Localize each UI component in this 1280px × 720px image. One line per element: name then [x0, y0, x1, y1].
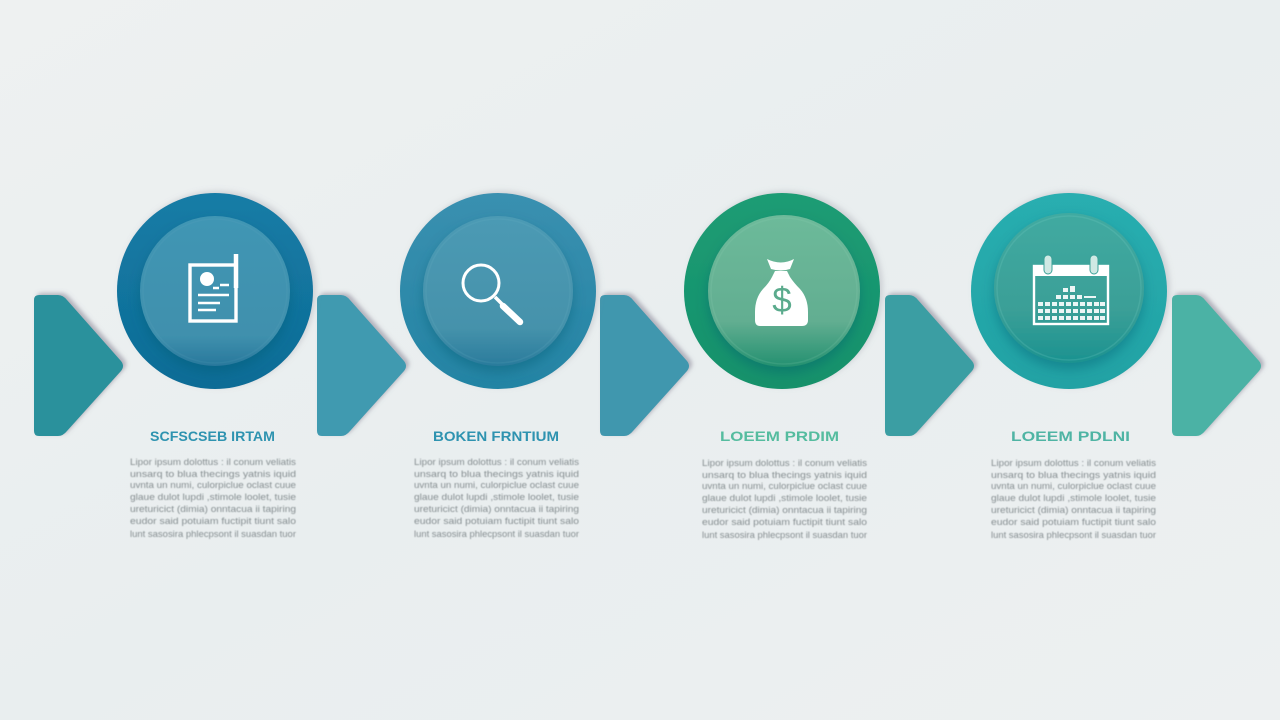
text block 4: ureturicict (dimia) onntacua ii tapiring	[991, 505, 1156, 516]
icon: magnifying glass	[463, 265, 520, 322]
text block 2: eudor said potuiam fuctipit tiunt salo	[414, 516, 579, 527]
text block 2: glaue dulot lupdi ,stimole loolet, tusie	[414, 492, 579, 503]
icon: document	[190, 254, 236, 321]
heading 1: SCFSCSEB IRTAM	[150, 428, 275, 444]
text block 4: uvnta un numi, culorpiclue oclast cuue	[991, 481, 1156, 492]
text block 3: Lipor ipsum dolottus : il conum veliatis	[702, 458, 867, 469]
text block 3: lunt sasosira phlecpsont il suasdan tuor	[702, 530, 867, 541]
text block 1: lunt sasosira phlecpsont il suasdan tuor	[130, 529, 296, 540]
text block 3: uvnta un numi, culorpiclue oclast cuue	[702, 481, 867, 492]
heading 2: BOKEN FRNTIUM	[433, 428, 559, 444]
text block 4	[991, 458, 1156, 541]
arrow 1	[34, 295, 123, 436]
text block 2: unsarq to blua thecings yatnis iquid	[414, 469, 579, 480]
step 1 circle	[117, 193, 313, 389]
text block 3	[702, 458, 867, 541]
icon: calendar	[1034, 255, 1108, 324]
text block 3: eudor said potuiam fuctipit tiunt salo	[702, 517, 867, 528]
text block 1: ureturicict (dimia) onntacua ii tapiring	[130, 504, 296, 515]
heading 3: LOEEM PRDIM	[720, 428, 839, 444]
text block 1: unsarq to blua thecings yatnis iquid	[130, 469, 296, 480]
text block 2: Lipor ipsum dolottus : il conum veliatis	[414, 457, 579, 468]
text block 4: lunt sasosira phlecpsont il suasdan tuor	[991, 530, 1156, 541]
heading 4: LOEEM PDLNI	[1011, 428, 1130, 444]
text block 1: glaue dulot lupdi ,stimole loolet, tusie	[130, 492, 296, 503]
text block 1	[130, 457, 296, 540]
text block 3: unsarq to blua thecings yatnis iquid	[702, 470, 867, 481]
text block 3: ureturicict (dimia) onntacua ii tapiring	[702, 505, 867, 516]
icon: money bag: $	[772, 281, 792, 320]
text block 2: uvnta un numi, culorpiclue oclast cuue	[414, 480, 579, 491]
text block 2	[414, 457, 579, 540]
text block 2: ureturicict (dimia) onntacua ii tapiring	[414, 504, 579, 515]
text block 3: glaue dulot lupdi ,stimole loolet, tusie	[702, 493, 867, 504]
text block 4: unsarq to blua thecings yatnis iquid	[991, 470, 1156, 481]
step 4 circle	[971, 193, 1167, 389]
text block 1: uvnta un numi, culorpiclue oclast cuue	[130, 480, 296, 491]
text block 4: glaue dulot lupdi ,stimole loolet, tusie	[991, 493, 1156, 504]
text block 4: Lipor ipsum dolottus : il conum veliatis	[991, 458, 1156, 469]
text block 1: eudor said potuiam fuctipit tiunt salo	[130, 516, 296, 527]
text block 4: eudor said potuiam fuctipit tiunt salo	[991, 517, 1156, 528]
step 2 circle	[400, 193, 596, 389]
arrow 3	[600, 295, 689, 436]
text block 1: Lipor ipsum dolottus : il conum veliatis	[130, 457, 296, 468]
text block 2: lunt sasosira phlecpsont il suasdan tuor	[414, 529, 579, 540]
arrow 4	[885, 295, 974, 436]
step 3 circle	[684, 193, 880, 389]
arrow 5	[1172, 295, 1261, 436]
arrow 2	[317, 295, 406, 436]
icon: money bag	[755, 259, 808, 326]
